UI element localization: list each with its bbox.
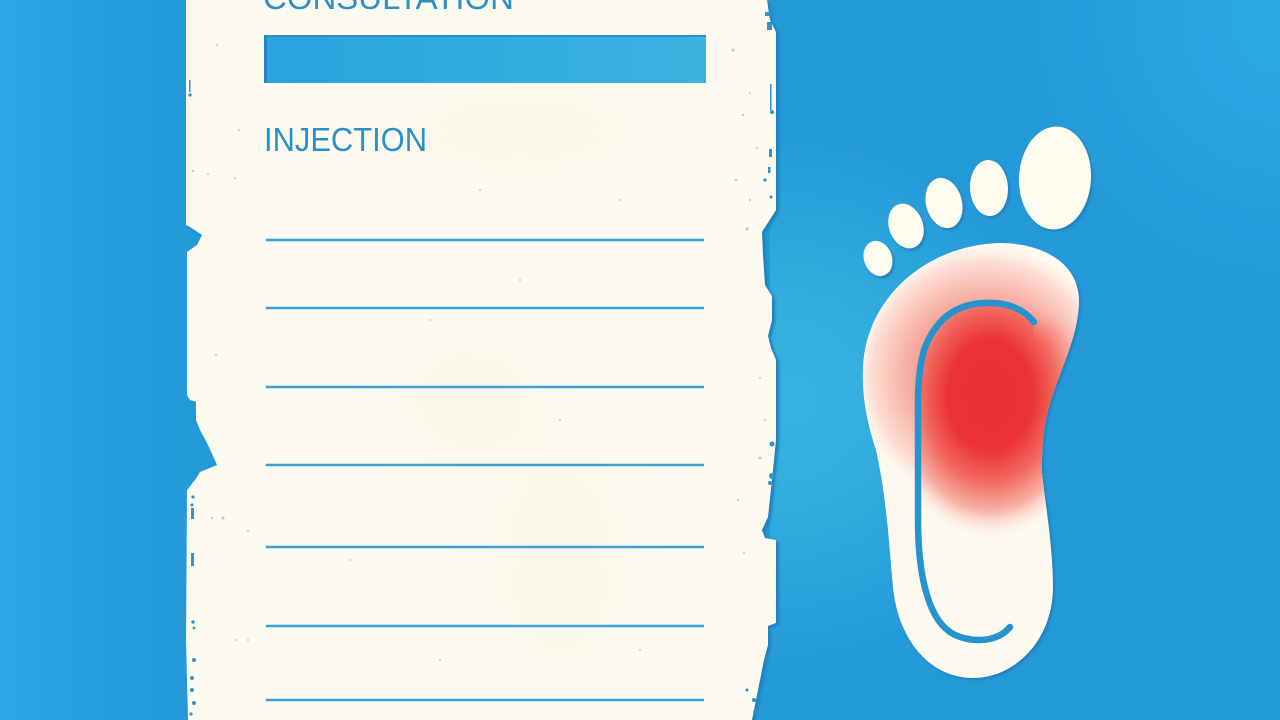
foot shadow bbox=[861, 127, 1096, 680]
icon: foot with heel pain bbox=[850, 125, 1096, 680]
toes bbox=[859, 125, 1094, 280]
paper specks and torn flecks bbox=[188, 12, 775, 716]
form lines bbox=[266, 240, 704, 700]
red pain area bbox=[862, 244, 1079, 532]
arch line bbox=[918, 303, 1034, 640]
paper mottling bbox=[400, 90, 640, 670]
panel: torn paper form bbox=[186, 0, 776, 720]
consultation input bar bbox=[264, 35, 706, 83]
heading: injection: INJECTION bbox=[264, 121, 427, 158]
sole bbox=[863, 243, 1079, 678]
paper shadow bbox=[189, 2, 779, 720]
